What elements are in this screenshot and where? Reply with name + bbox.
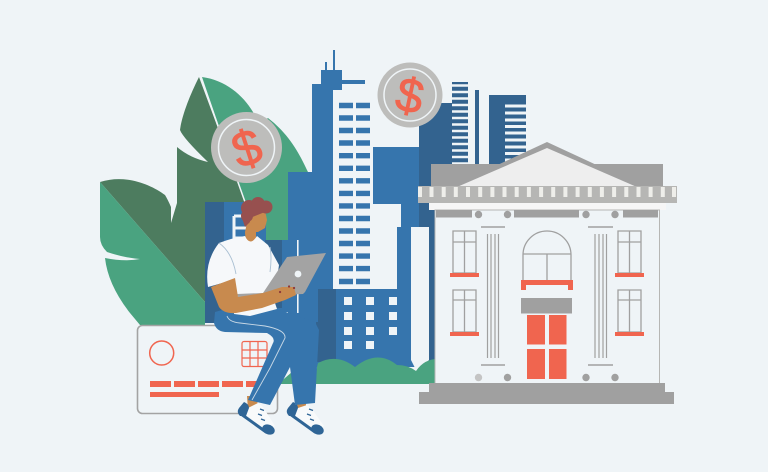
columns	[481, 227, 613, 365]
windows	[453, 231, 641, 332]
coin: right: $	[391, 68, 428, 125]
roof and pediment	[431, 142, 663, 187]
bush	[278, 357, 440, 384]
blue building behind person	[205, 172, 318, 323]
ankles	[247, 396, 306, 410]
credit card	[138, 326, 278, 414]
coin: left: $	[225, 118, 269, 179]
door	[527, 315, 566, 379]
neck and face	[245, 210, 267, 244]
wall	[435, 210, 660, 384]
arched window	[523, 231, 571, 281]
trousers	[214, 305, 319, 405]
main tower	[288, 50, 419, 367]
laptop	[237, 253, 326, 297]
frieze bars and studs	[436, 210, 658, 381]
skyline buildings	[205, 50, 526, 373]
door lintel	[521, 298, 572, 314]
bank building	[418, 142, 677, 404]
lower blue block	[316, 227, 429, 372]
arm and hand	[211, 278, 296, 313]
shirt	[207, 236, 279, 316]
cornice	[418, 186, 677, 210]
rear dark tower with stripes	[419, 82, 526, 373]
window sills	[450, 273, 644, 336]
leaves	[100, 77, 312, 325]
shoes	[238, 402, 325, 437]
coin: left	[211, 112, 282, 183]
hair	[241, 197, 272, 227]
coin: right	[378, 62, 442, 128]
arch sill	[521, 280, 573, 290]
steps	[419, 383, 674, 404]
person with laptop	[207, 197, 326, 437]
